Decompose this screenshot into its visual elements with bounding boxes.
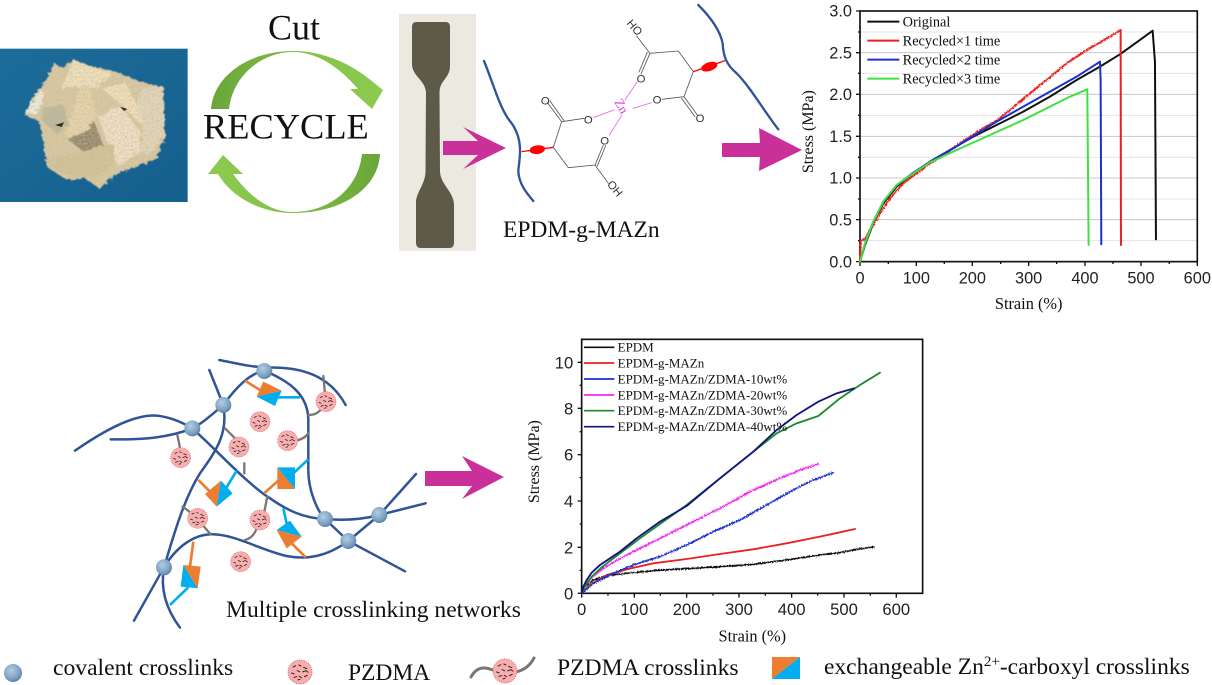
label: covalent crosslinks: covalent crosslinks: [53, 655, 233, 681]
y tick labels: 8: [564, 399, 573, 418]
arrow: specimen to molecule: [443, 127, 506, 169]
atom labels: O: [696, 113, 705, 125]
curve: recycled 2 times: [860, 62, 1101, 262]
exchangeable crosslink lower left: [170, 542, 201, 605]
chart: recycled stress-strain curves: [800, 3, 1211, 313]
x tick labels: 400: [778, 600, 806, 619]
x tick labels: 600: [1184, 269, 1211, 287]
axis frame and ticks: [578, 339, 923, 598]
legend: EPDM-g-MAZn/ZDMA-30wt%: [618, 403, 787, 418]
legend: Recycled×3 time: [903, 71, 1000, 87]
exchangeable crosslink middle right: [264, 459, 308, 493]
arrow: molecule to chart: [722, 128, 802, 171]
polymer chains: [75, 360, 426, 628]
exchangeable crosslink middle left: [198, 471, 237, 507]
y tick labels: 1.5: [829, 128, 852, 146]
curve: EPDM: [582, 547, 874, 593]
x tick labels: [577, 600, 910, 619]
chart: ZDMA content stress-strain curves: [526, 339, 923, 645]
legend: EPDM-g-MAZn: [618, 355, 705, 370]
zinc coordination bonds: [594, 82, 652, 135]
y tick labels: 6: [564, 446, 573, 465]
icon: exchangeable crosslink: [772, 657, 800, 679]
legend: crosslink key: [4, 654, 1190, 685]
heading: Cut: Cut: [268, 8, 320, 48]
graft link right: [693, 61, 725, 73]
axis frame and ticks: [856, 11, 1197, 266]
atom labels: HO: [624, 18, 644, 39]
icon: PZDMA crosslink: [471, 658, 534, 683]
curve: recycled 1 time: [860, 31, 1120, 262]
y tick labels: [555, 353, 573, 603]
curve: ZDMA 10wt%: [582, 473, 833, 593]
legend: EPDM-g-MAZn/ZDMA-20wt%: [618, 387, 787, 402]
label: EPDM-g-MAZn: EPDM-g-MAZn: [503, 217, 660, 243]
graft link left: [522, 145, 553, 154]
atom labels: Zn: [611, 96, 632, 117]
y tick labels: 0.5: [829, 211, 852, 229]
polymer chain right: [698, 5, 778, 129]
legend: [867, 14, 1000, 87]
x tick labels: 500: [1127, 269, 1155, 287]
x tick labels: 200: [673, 600, 701, 619]
legend: [584, 340, 787, 434]
y tick labels: 2: [564, 538, 573, 557]
legend: EPDM-g-MAZn/ZDMA-10wt%: [618, 371, 787, 386]
atom labels: O: [584, 114, 593, 126]
PZDMA connectors: [177, 376, 325, 540]
x tick labels: 600: [882, 600, 910, 619]
atom labels: O: [653, 95, 662, 107]
legend: EPDM: [618, 340, 654, 355]
label: exchangeable crosslinks: 2+: [984, 654, 1000, 670]
x tick labels: 100: [903, 269, 930, 287]
y tick labels: 0: [564, 584, 573, 603]
x tick labels: 400: [1071, 269, 1099, 287]
label: PZDMA crosslinks: PZDMA crosslinks: [557, 655, 739, 681]
atom labels: [541, 18, 705, 199]
atom labels: OH: [604, 179, 624, 199]
exchangeable crosslink top: [245, 381, 300, 406]
PZDMA particles: [171, 392, 336, 572]
legend: Original: [903, 14, 950, 30]
polymer chain left: [484, 61, 533, 201]
photo: dog-bone tensile specimen: [399, 14, 476, 251]
x tick labels: 0: [577, 600, 586, 619]
atom labels: O: [541, 95, 550, 107]
y tick labels: 1.0: [829, 170, 852, 188]
icon: recycle arrow bottom: [208, 154, 380, 213]
icon: PZDMA: [288, 660, 312, 684]
curve: ZDMA 40wt%: [582, 388, 854, 593]
photo: shredded recycled rubber flakes: [0, 49, 188, 202]
chart: ZDMA content stress-strain curves: Strain (%): [719, 626, 786, 645]
icon: recycle arrow top: [211, 51, 383, 109]
grid lines: [860, 32, 1197, 241]
arrow: network to chart: [425, 456, 504, 499]
x tick labels: 500: [830, 600, 858, 619]
axis titles: Stress (MPa): [526, 420, 543, 503]
atom labels: O: [637, 73, 646, 85]
y tick labels: 2.5: [829, 44, 852, 62]
curve: ZDMA 20wt%: [582, 464, 818, 593]
label: exchangeable crosslinks: -carboxyl crosslinks: [1000, 654, 1190, 680]
diagram: EPDM-g-MAZn molecular structure: [484, 5, 778, 201]
x tick labels: [855, 269, 1211, 287]
legend: Recycled×2 time: [903, 52, 1000, 68]
y tick labels: 10: [555, 353, 573, 372]
y tick labels: 3.0: [829, 3, 852, 21]
x tick labels: 300: [725, 600, 753, 619]
diagram: multiple crosslinking network: [75, 360, 426, 628]
curve: recycled 3 times: [860, 89, 1089, 262]
y tick labels: 2.0: [829, 86, 852, 104]
label: exchangeable crosslinks: exchangeable Zn: [824, 654, 984, 680]
y tick labels: [829, 3, 852, 271]
axis titles: Stress (MPa): [800, 90, 817, 173]
curve: ZDMA 30wt%: [582, 373, 880, 593]
atom labels: O: [600, 135, 609, 147]
y tick labels: 0.0: [829, 253, 852, 271]
label: Multiple crosslinking networks: Multiple crosslinking networks: [226, 597, 521, 623]
legend: Recycled×1 time: [903, 33, 1000, 49]
x tick labels: 200: [959, 269, 986, 287]
x tick labels: 0: [855, 269, 865, 287]
carbon bonds: [547, 36, 697, 183]
curve: original: [860, 31, 1156, 262]
legend: EPDM-g-MAZn/ZDMA-40wt%: [618, 419, 787, 434]
covalent crosslink nodes: [156, 363, 387, 575]
curve: EPDM-g-MAZn: [582, 529, 855, 593]
exchangeable crosslink lower right: [277, 508, 306, 557]
x tick labels: 100: [620, 600, 648, 619]
chart: recycled stress-strain curves: Strain (%): [995, 294, 1062, 313]
drop line: recycled 1 time: [1118, 30, 1124, 245]
x tick labels: 300: [1015, 269, 1042, 287]
label: RECYCLE: RECYCLE: [203, 106, 369, 146]
icon: covalent crosslink: [4, 664, 22, 682]
y tick labels: 4: [564, 492, 573, 511]
